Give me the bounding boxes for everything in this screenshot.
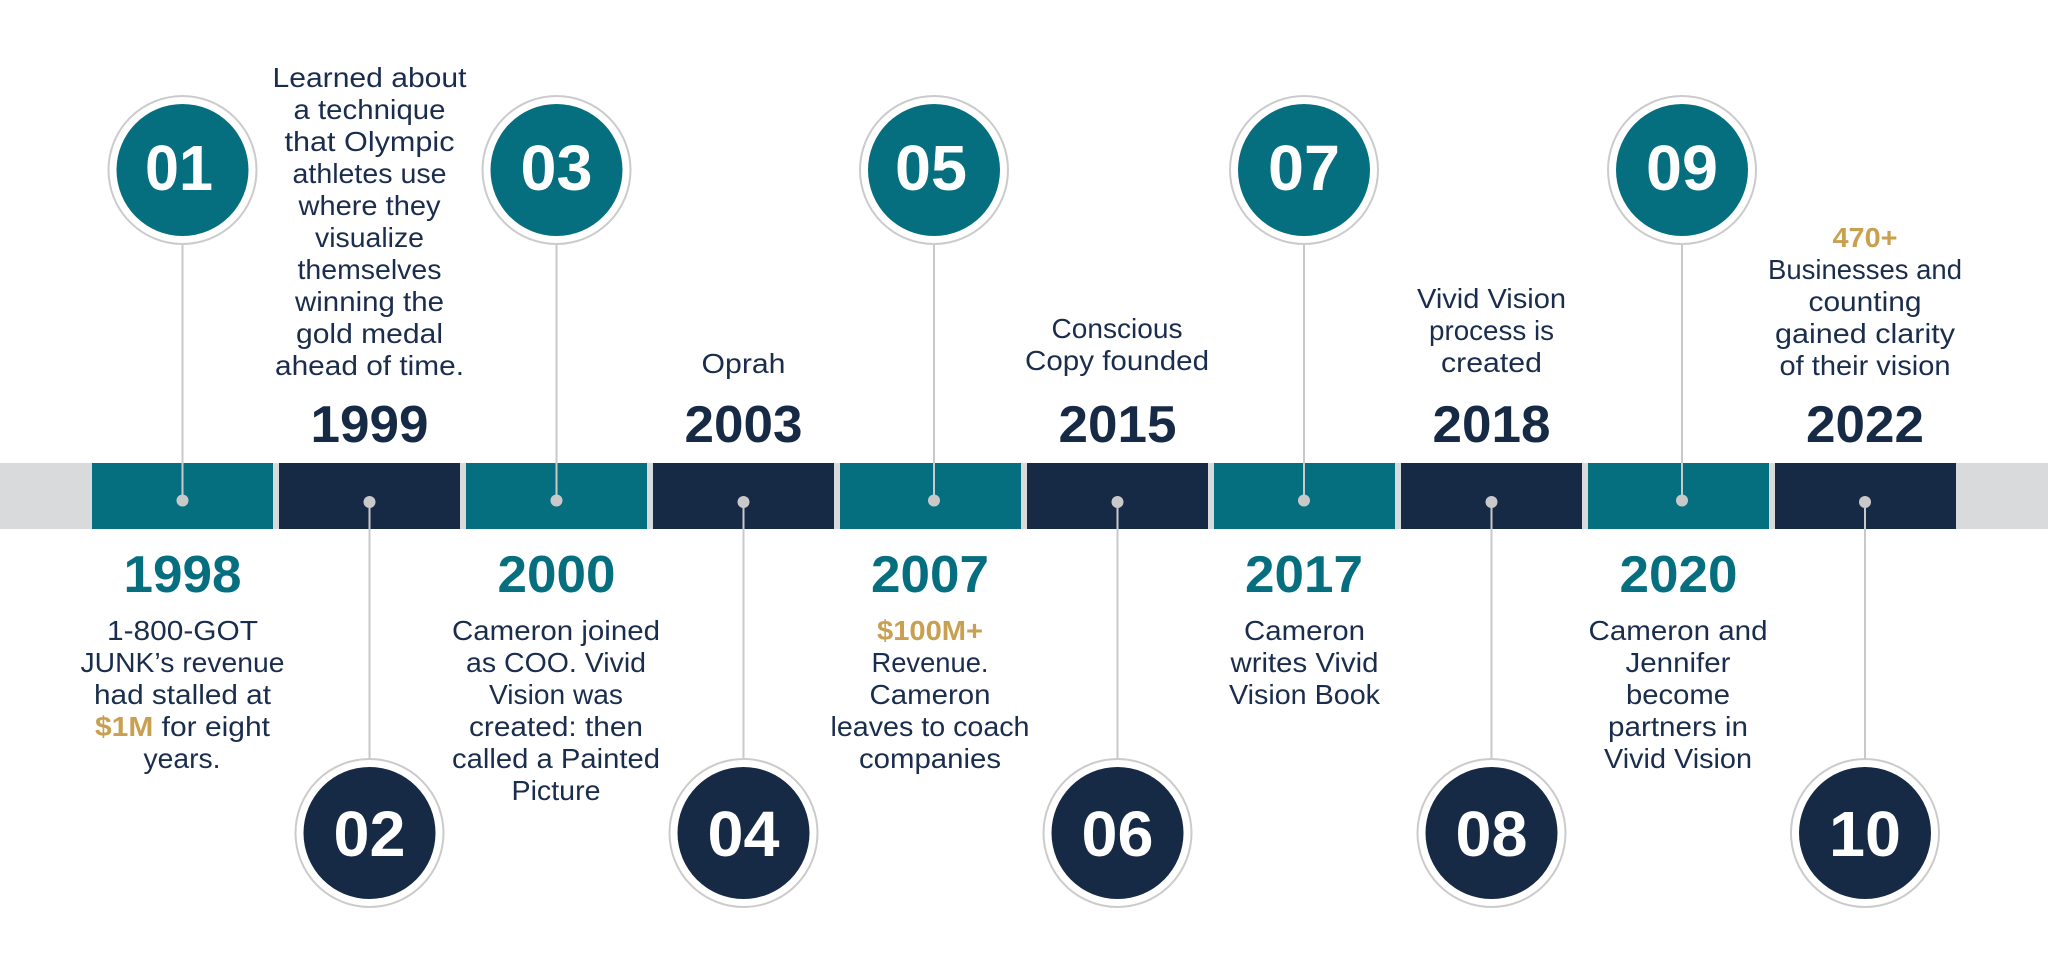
milestone 05: 2007: leaves to coach — [830, 711, 1030, 742]
milestone 03: 2000 — [452, 96, 660, 806]
milestone 06: 2015: 06 — [1082, 798, 1154, 870]
milestone 09: 2020: 09 — [1646, 132, 1718, 204]
milestone 09: 2020: Cameron and — [1588, 615, 1768, 646]
milestone 07: 2017: Cameron — [1244, 615, 1365, 646]
milestone 02: 1999: visualize — [315, 222, 424, 253]
milestone 05: 2007 — [830, 96, 1030, 774]
milestone 04: 2003: 04 — [708, 798, 780, 870]
milestone 05: 2007: Cameron — [870, 679, 990, 710]
milestone 10: 2022 — [1768, 222, 1962, 907]
milestone 03: 2000: created: then — [469, 711, 643, 742]
milestone 02: 1999: winning the — [294, 286, 444, 317]
milestone 05: 2007: $100M+ — [877, 615, 983, 646]
milestone 06: 2015: 2015 — [1058, 396, 1176, 454]
milestone 08: 2018: 2018 — [1432, 396, 1550, 454]
milestone 02: 1999: 1999 — [310, 396, 428, 454]
milestone 02: 1999 — [272, 62, 467, 907]
milestone 04: 2003: Oprah — [702, 348, 786, 379]
milestone 06: 2015: Conscious — [1052, 313, 1182, 344]
milestone 06: 2015 — [1025, 313, 1209, 907]
milestone 02: 1999: gold medal — [296, 318, 443, 349]
milestone 01: 1998: 1998 — [124, 546, 242, 604]
milestone 05: 2007: 05 — [895, 132, 967, 204]
milestone 09: 2020: Vivid Vision — [1604, 743, 1752, 774]
milestone 03: 2000: Cameron joined — [452, 615, 660, 646]
milestone 02: 1999: 02 — [334, 798, 406, 870]
milestone 01: 1998: had stalled at — [94, 679, 271, 710]
milestone 06: 2015: Copy founded — [1025, 345, 1209, 376]
milestone 10: 2022: 2022 — [1806, 396, 1924, 454]
milestone 02: 1999: ahead of time. — [275, 350, 464, 381]
timeline bar — [0, 463, 2048, 529]
milestone 04: 2003: 2003 — [684, 396, 802, 454]
milestone 03: 2000: Vision was — [489, 679, 623, 710]
milestone 10: 2022: gained clarity — [1775, 318, 1955, 349]
milestone 05: 2007: Revenue. — [872, 647, 988, 678]
milestone 09: 2020: partners in — [1608, 711, 1748, 742]
milestone 01: 1998: 01 — [145, 132, 213, 204]
milestone 10: 2022: 10 — [1829, 798, 1901, 870]
milestone 07: 2017 — [1229, 96, 1381, 710]
milestone 10: 2022: counting — [1808, 286, 1922, 317]
milestone 02: 1999: Learned about — [272, 62, 467, 93]
milestone 08: 2018: Vivid Vision — [1417, 283, 1566, 314]
milestone 10: 2022: 470+ — [1832, 222, 1898, 253]
milestone 08: 2018 — [1417, 283, 1566, 907]
milestone 09: 2020: become — [1626, 679, 1730, 710]
milestone 07: 2017: writes Vivid — [1229, 647, 1378, 678]
milestone 04: 2003 — [670, 348, 818, 907]
milestone 03: 2000: 03 — [520, 132, 592, 204]
milestone 01: 1998: years. — [144, 743, 220, 774]
milestone 08: 2018: process is — [1429, 315, 1554, 346]
milestone 01: 1998: 1-800-GOT — [107, 615, 258, 646]
milestone 02: 1999: athletes use — [292, 158, 446, 189]
milestone 01: 1998: $1M for eight — [95, 711, 270, 742]
milestone 01: 1998 — [80, 96, 284, 774]
milestone 10: 2022: Businesses and — [1768, 254, 1962, 285]
milestone 10: 2022: of their vision — [1780, 350, 1950, 381]
milestone 05: 2007: companies — [859, 743, 1001, 774]
milestone 03: 2000: Picture — [512, 775, 600, 806]
milestone 05: 2007: 2007 — [871, 546, 989, 604]
milestone 07: 2017: 2017 — [1245, 546, 1363, 604]
milestone 03: 2000: as COO. Vivid — [466, 647, 646, 678]
milestone 01: 1998: JUNK’s revenue — [80, 647, 284, 678]
milestone 03: 2000: called a Painted — [452, 743, 660, 774]
milestone 09: 2020 — [1588, 96, 1768, 774]
milestone 07: 2017: Vision Book — [1229, 679, 1381, 710]
milestone 02: 1999: a technique — [294, 94, 446, 125]
milestone 08: 2018: 08 — [1456, 798, 1528, 870]
milestone 02: 1999: that Olympic — [284, 126, 454, 157]
milestone 09: 2020: Jennifer — [1626, 647, 1730, 678]
milestone 09: 2020: 2020 — [1620, 546, 1738, 604]
milestone 02: 1999: where they — [297, 190, 440, 221]
milestone 03: 2000: 2000 — [498, 546, 616, 604]
milestone 08: 2018: created — [1441, 347, 1542, 378]
milestone 07: 2017: 07 — [1268, 132, 1340, 204]
milestone 02: 1999: themselves — [298, 254, 442, 285]
